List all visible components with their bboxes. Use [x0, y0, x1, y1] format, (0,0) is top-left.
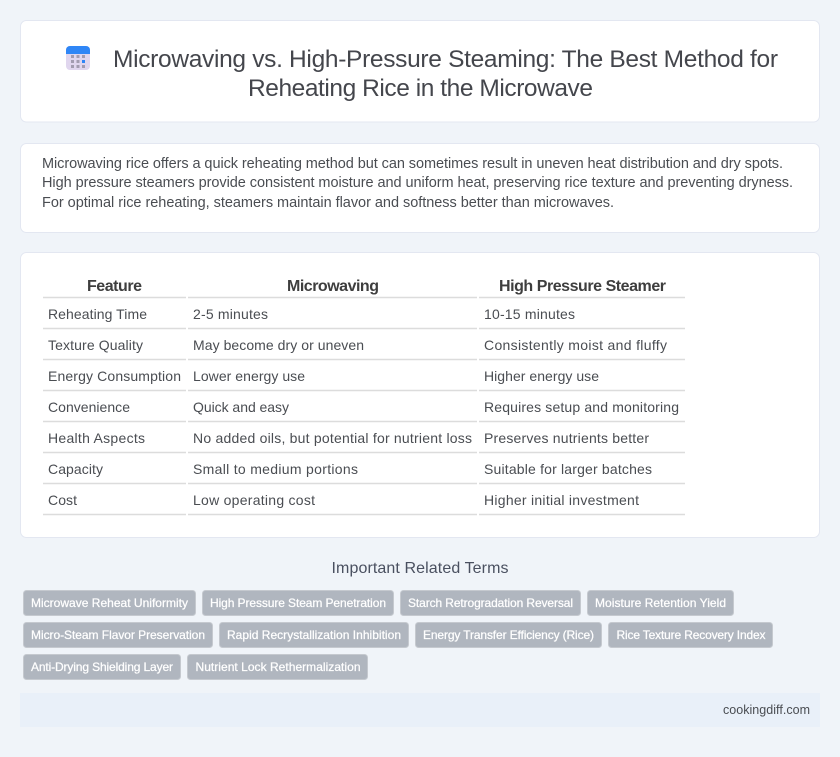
tag: Anti-Drying Shielding Layer — [31, 660, 173, 674]
tag: Micro-Steam Flavor Preservation — [31, 628, 205, 642]
table header — [87, 278, 666, 295]
row: reheating time — [48, 306, 575, 322]
row: texture quality — [48, 337, 667, 353]
footer bar: cookingdiff.com — [723, 703, 810, 717]
row: texture quality: Texture Quality — [48, 337, 143, 353]
icon: calendar — [66, 46, 90, 70]
tag: High Pressure Steam Penetration — [210, 596, 386, 610]
row: capacity — [48, 461, 652, 477]
tag — [588, 590, 734, 616]
row: energy consumption: Lower energy use — [193, 368, 305, 384]
row: cost: Cost — [48, 492, 77, 508]
tag: Energy Transfer Efficiency (Rice) — [423, 628, 594, 642]
table header: Feature — [87, 278, 142, 295]
tag: Starch Retrogradation Reversal — [408, 596, 573, 610]
tags: related terms — [24, 590, 772, 680]
footer bar — [20, 693, 820, 727]
row: convenience — [48, 399, 679, 415]
row: reheating time: Reheating Time — [48, 306, 147, 322]
tag — [24, 622, 212, 648]
tag — [400, 590, 580, 616]
tag — [416, 622, 602, 648]
row: energy consumption: Energy Consumption — [48, 368, 181, 384]
row: texture quality: May become dry or uneven — [193, 337, 364, 353]
title — [113, 46, 778, 102]
row: capacity: Small to medium portions — [193, 461, 358, 477]
heading: related terms: Important Related Terms — [332, 560, 508, 577]
row: convenience: Convenience — [48, 399, 130, 415]
row: capacity: Capacity — [48, 461, 103, 477]
tag — [220, 622, 408, 648]
row: cost: Higher initial investment — [484, 492, 639, 508]
row: health aspects: Preserves nutrients better — [484, 430, 649, 446]
tag — [608, 622, 772, 648]
tag — [24, 654, 180, 680]
row: cost: Low operating cost — [193, 492, 315, 508]
row: convenience: Quick and easy — [193, 399, 289, 415]
row: energy consumption: Higher energy use — [484, 368, 599, 384]
row: reheating time: 2-5 minutes — [193, 306, 268, 322]
tag — [188, 654, 368, 680]
tag — [202, 590, 394, 616]
tag: Moisture Retention Yield — [595, 596, 726, 610]
row: energy consumption — [48, 368, 599, 384]
panel: intro text: Microwaving rice offers a quick reheating method but can sometimes result in uneven heat distribution and dry spots. — [42, 156, 783, 172]
tag: Rapid Recrystallization Inhibition — [227, 628, 401, 642]
title: Microwaving vs. High-Pressure Steaming: The Best Method for — [113, 46, 778, 73]
tag: Microwave Reheat Uniformity — [31, 596, 188, 610]
row: convenience: Requires setup and monitoring — [484, 399, 679, 415]
tag: Nutrient Lock Rethermalization — [196, 660, 360, 674]
panel: title card — [20, 20, 820, 122]
row: texture quality: Consistently moist and fluffy — [484, 337, 667, 353]
tag — [24, 590, 196, 616]
panel: intro text: For optimal rice reheating, steamers maintain flavor and softness better than microwaves. — [42, 195, 614, 211]
row: capacity: Suitable for larger batches — [484, 461, 652, 477]
panel: comparison table — [20, 252, 820, 538]
panel: intro text: High pressure steamers provide consistent moisture and uniform heat, preserving rice texture and preventing dryness. — [42, 175, 793, 191]
table header: Microwaving — [287, 278, 379, 295]
panel: intro text — [20, 144, 820, 232]
title: Reheating Rice in the Microwave — [248, 75, 593, 102]
row: health aspects: No added oils, but potential for nutrient loss — [193, 430, 472, 446]
row: cost — [48, 492, 639, 508]
tag: Rice Texture Recovery Index — [616, 628, 766, 642]
row: health aspects — [48, 430, 649, 446]
row: reheating time: 10-15 minutes — [484, 306, 575, 322]
row: health aspects: Health Aspects — [48, 430, 145, 446]
table header: High Pressure Steamer — [499, 278, 666, 295]
